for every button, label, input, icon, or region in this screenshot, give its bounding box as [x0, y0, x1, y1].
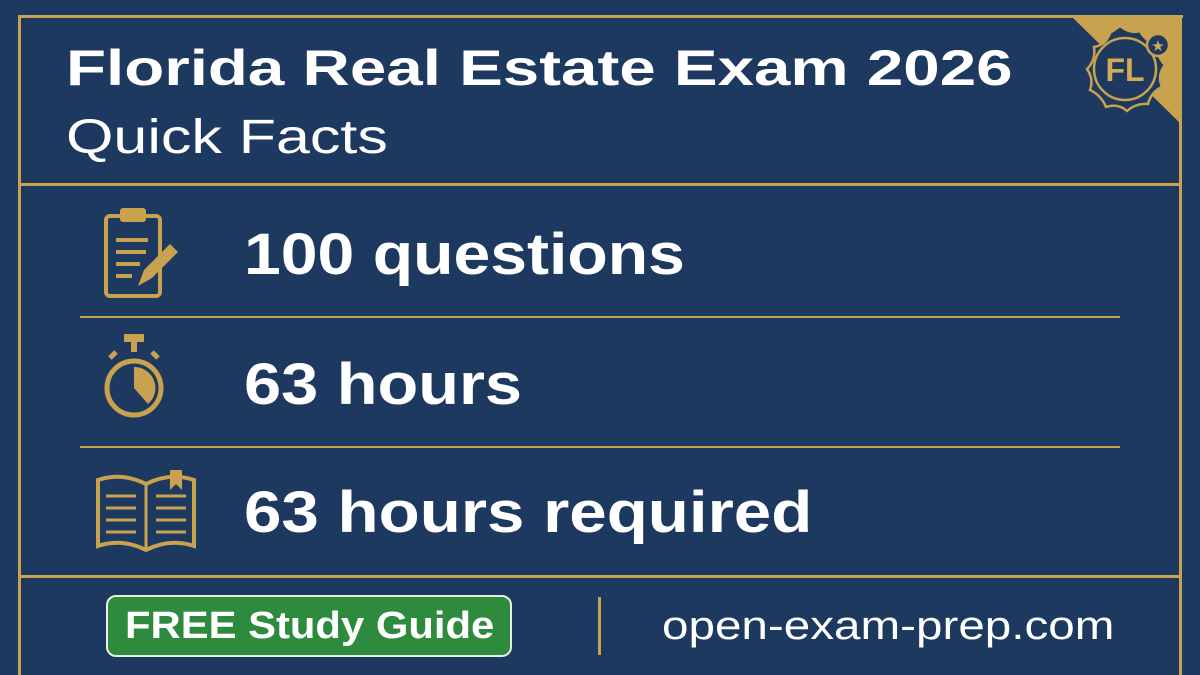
url: open-exam-prep.com [662, 604, 1114, 648]
row: hours [104, 334, 522, 418]
button: FREE Study Guide [106, 595, 512, 657]
icon: open book [96, 470, 196, 552]
badge: FL seal: ★ [1151, 38, 1165, 55]
text: 63 hours: 63 hours [244, 352, 522, 417]
divider [80, 316, 1120, 318]
text: 100 questions: 100 questions [244, 222, 685, 287]
row: questions [104, 208, 685, 298]
row: required hours [96, 470, 812, 552]
text: 63 hours required: 63 hours required [244, 480, 812, 545]
icon: clipboard [104, 208, 178, 298]
divider vertical [598, 597, 601, 655]
badge: FL seal [1085, 28, 1168, 112]
title: Florida Real Estate Exam 2026 [66, 40, 1013, 96]
subtitle: Quick Facts [66, 111, 388, 164]
divider [80, 446, 1120, 448]
icon: stopwatch [104, 334, 164, 418]
button: FREE Study Guide: FREE Study Guide [125, 605, 494, 647]
badge: FL seal: FL [1105, 52, 1145, 88]
